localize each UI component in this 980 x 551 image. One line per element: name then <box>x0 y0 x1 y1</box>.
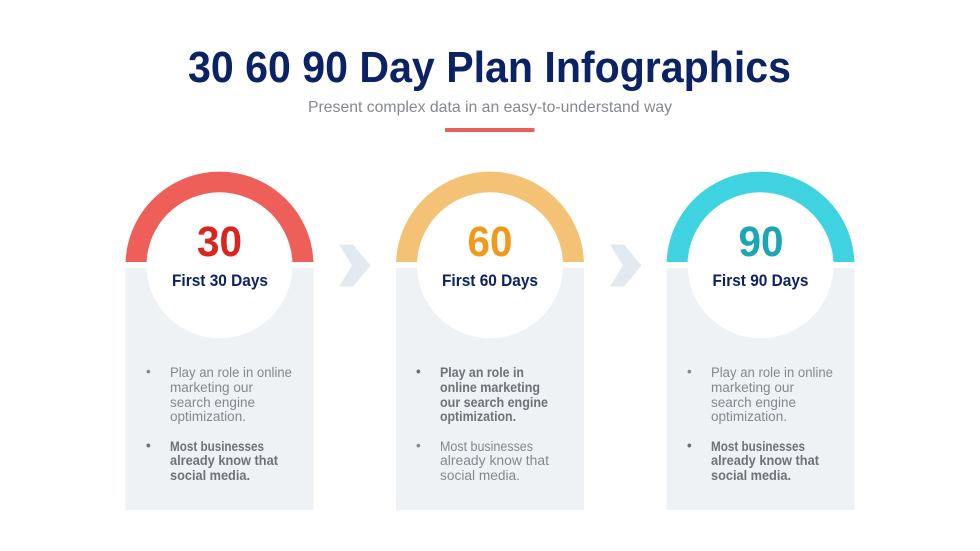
number 90: 90 <box>738 218 784 266</box>
bullet list: our search engine <box>440 395 548 410</box>
bullet list: marketing our <box>711 380 794 395</box>
card background <box>126 268 314 510</box>
bullet list: • <box>146 438 151 453</box>
bullet list: marketing our <box>170 380 253 395</box>
panel: first 30 days <box>126 172 314 510</box>
bullet list: optimization. <box>170 409 246 424</box>
white circle <box>688 192 834 338</box>
bullet list: already know that <box>170 453 278 468</box>
bullet list: social media. <box>440 468 520 483</box>
label: first 30 days: First 30 Days <box>172 272 268 290</box>
bullet list: Play an role in online <box>711 365 833 380</box>
white circle <box>417 192 563 338</box>
bullet list: search engine <box>170 395 255 410</box>
title underline <box>445 128 534 132</box>
arrow 1 <box>339 244 370 286</box>
bullet list: social media. <box>170 468 250 483</box>
label: first 60 days: First 60 Days <box>442 272 538 290</box>
bullet list: social media. <box>711 468 791 483</box>
bullet list: • <box>416 364 421 379</box>
bullet list: Play an role in online <box>170 365 292 380</box>
bullet list: optimization. <box>440 409 516 424</box>
bullet list: Most businesses <box>170 439 264 454</box>
bullet list: online marketing <box>440 380 540 395</box>
label: first 90 days: First 90 Days <box>712 272 808 290</box>
bullet list: Play an role in <box>440 365 524 380</box>
number 60: 60 <box>468 218 512 266</box>
bullet list: optimization. <box>711 409 787 424</box>
bullet list: Most businesses <box>440 439 533 454</box>
bullet list <box>687 364 833 483</box>
bullet list: • <box>416 438 421 453</box>
title: 30 60 90 Day Plan Infographics <box>188 43 791 92</box>
bullet list <box>146 364 292 483</box>
number 30: 30 <box>197 218 242 266</box>
bullet list <box>416 364 549 483</box>
subtitle: Present complex data in an easy-to-understand way <box>308 99 672 116</box>
arrow 2 <box>610 244 642 286</box>
card background <box>666 268 854 510</box>
card background <box>396 268 584 510</box>
bullet list: Most businesses <box>711 439 805 454</box>
panel: first 90 days <box>666 172 854 510</box>
bullet list: • <box>687 438 692 453</box>
bullet list: already know that <box>711 453 819 468</box>
bullet list: search engine <box>711 395 796 410</box>
bullet list: • <box>146 364 151 379</box>
cyan arc <box>667 172 854 262</box>
red arc <box>126 172 313 262</box>
white circle <box>146 192 292 338</box>
orange arc <box>396 172 584 262</box>
bullet list: already know that <box>440 453 549 468</box>
bullet list: • <box>687 364 692 379</box>
panel: first 60 days <box>396 172 584 510</box>
